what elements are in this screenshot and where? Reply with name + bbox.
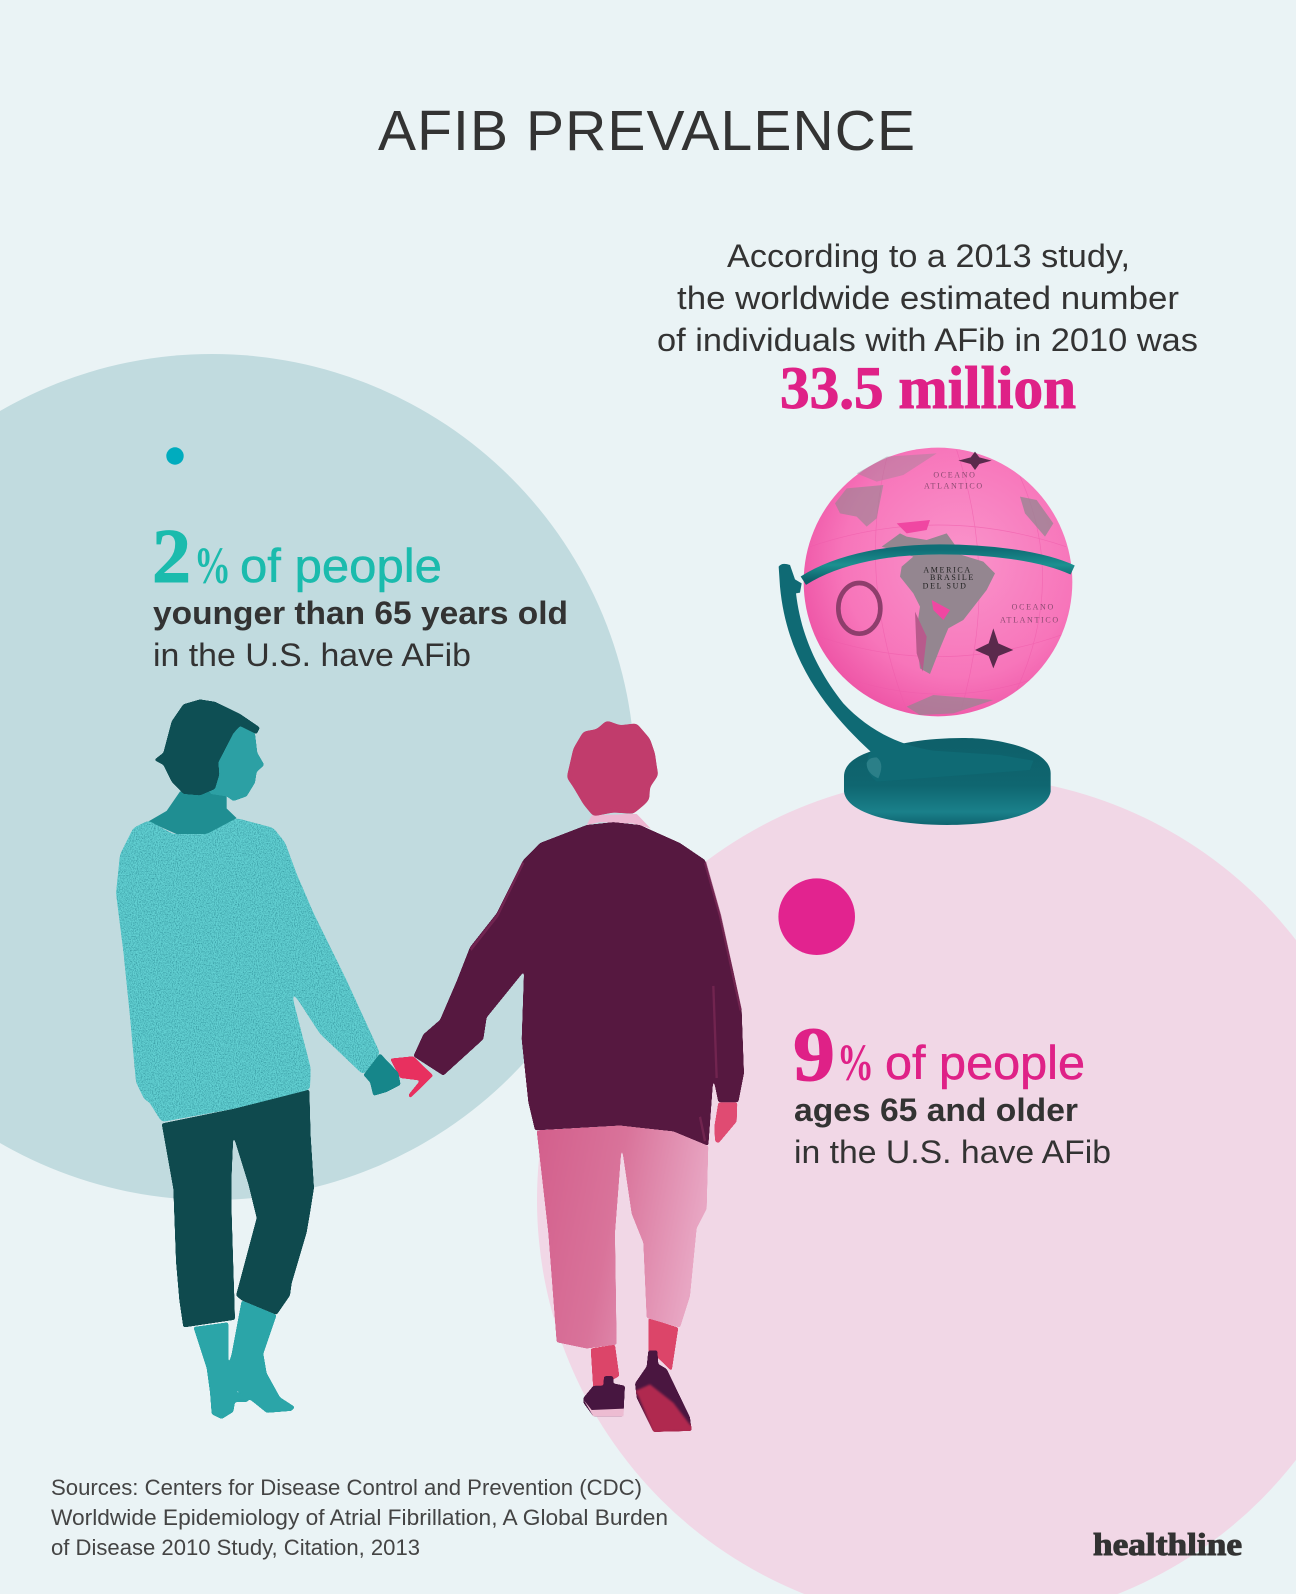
stat: 2% of people (152, 513, 442, 599)
globe equator ring (803, 549, 1073, 581)
worldwide intro text: the worldwide estimated number (677, 280, 1179, 316)
title: AFIB PREVALENCE (378, 99, 915, 163)
cartouche (838, 583, 880, 634)
text: younger than 65: younger than 65 years old (153, 595, 568, 631)
left shoe sole (584, 1400, 624, 1416)
worldwide intro text (657, 238, 1198, 358)
clasped hand (390, 1056, 433, 1098)
continents (835, 453, 1053, 715)
trousers (537, 1126, 708, 1348)
free hand (714, 1102, 737, 1143)
globe map labels: OCEANO (933, 470, 977, 479)
legs and feet (193, 1300, 295, 1419)
text: in the U.S. have AFib (under 65): in the U.S. have AFib (153, 637, 471, 673)
globe map labels: DEL SUD (923, 581, 968, 590)
sweater (116, 818, 380, 1122)
globe stand arm (779, 564, 1033, 782)
globe map labels: OCEANO (1012, 602, 1055, 611)
globe map labels: AMERICA (923, 566, 972, 575)
cardigan highlights (471, 862, 741, 1141)
globe map labels: BRASILE (930, 573, 975, 582)
globe map labels: ATLANTICO (924, 481, 984, 490)
icon: large pink dot (778, 878, 855, 955)
globe sphere (804, 448, 1072, 716)
hair (567, 720, 658, 816)
worldwide statistic: 33.5 million (780, 355, 1076, 421)
stat: 9% of people: of people (885, 1036, 1085, 1089)
sources: Sources: Centers for Disease Control and Prevention (CDC) (51, 1475, 642, 1500)
stat: 9% of people: % (837, 1035, 874, 1092)
worldwide intro text: According to a 2013 study, (727, 238, 1130, 274)
base recess highlight (867, 757, 881, 778)
stat: 9% of people: 9 (793, 1011, 835, 1097)
sources: Worldwide Epidemiology of Atrial Fibrillation, A Global Burden (51, 1505, 668, 1530)
globe map labels (923, 470, 1060, 625)
right shoe (635, 1350, 692, 1432)
illustration: older woman from behind (390, 720, 744, 1432)
text: in the U.S. have AFib (65+): in the U.S. have AFib (794, 1134, 1111, 1170)
icon: small teal dot (166, 447, 184, 465)
left shoe (583, 1376, 625, 1416)
panel: under-65 teal circle (0, 354, 635, 1200)
neck (148, 791, 237, 834)
hair (154, 699, 260, 795)
globe base (844, 738, 1051, 825)
collar (587, 814, 651, 828)
stat: 2% of people: % (194, 538, 231, 595)
face (210, 721, 264, 801)
panel: 65-and-older pink circle (537, 776, 1296, 1594)
legs (591, 1318, 678, 1391)
healthline logo: healthline (1093, 1526, 1242, 1562)
stat: 2% of people: of people (240, 539, 442, 592)
globe map labels: ATLANTICO (1000, 616, 1060, 625)
stat: 2% of people: 2 (152, 513, 191, 599)
trousers (162, 1090, 314, 1328)
text: ages 65 and older: ages 65 and older (794, 1092, 1078, 1128)
cardigan (413, 822, 744, 1146)
clasped hand (363, 1053, 401, 1096)
globe graticule (810, 450, 1066, 713)
compass roses (958, 452, 1013, 668)
worldwide intro text: of individuals with AFib in 2010 was (657, 322, 1198, 358)
sources (51, 1475, 668, 1560)
illustration: younger woman from behind (116, 699, 401, 1419)
illustration: globe on stand (779, 448, 1073, 825)
stat: 9% of people (793, 1011, 1085, 1097)
sources: of Disease 2010 Study, Citation, 2013 (51, 1535, 420, 1560)
